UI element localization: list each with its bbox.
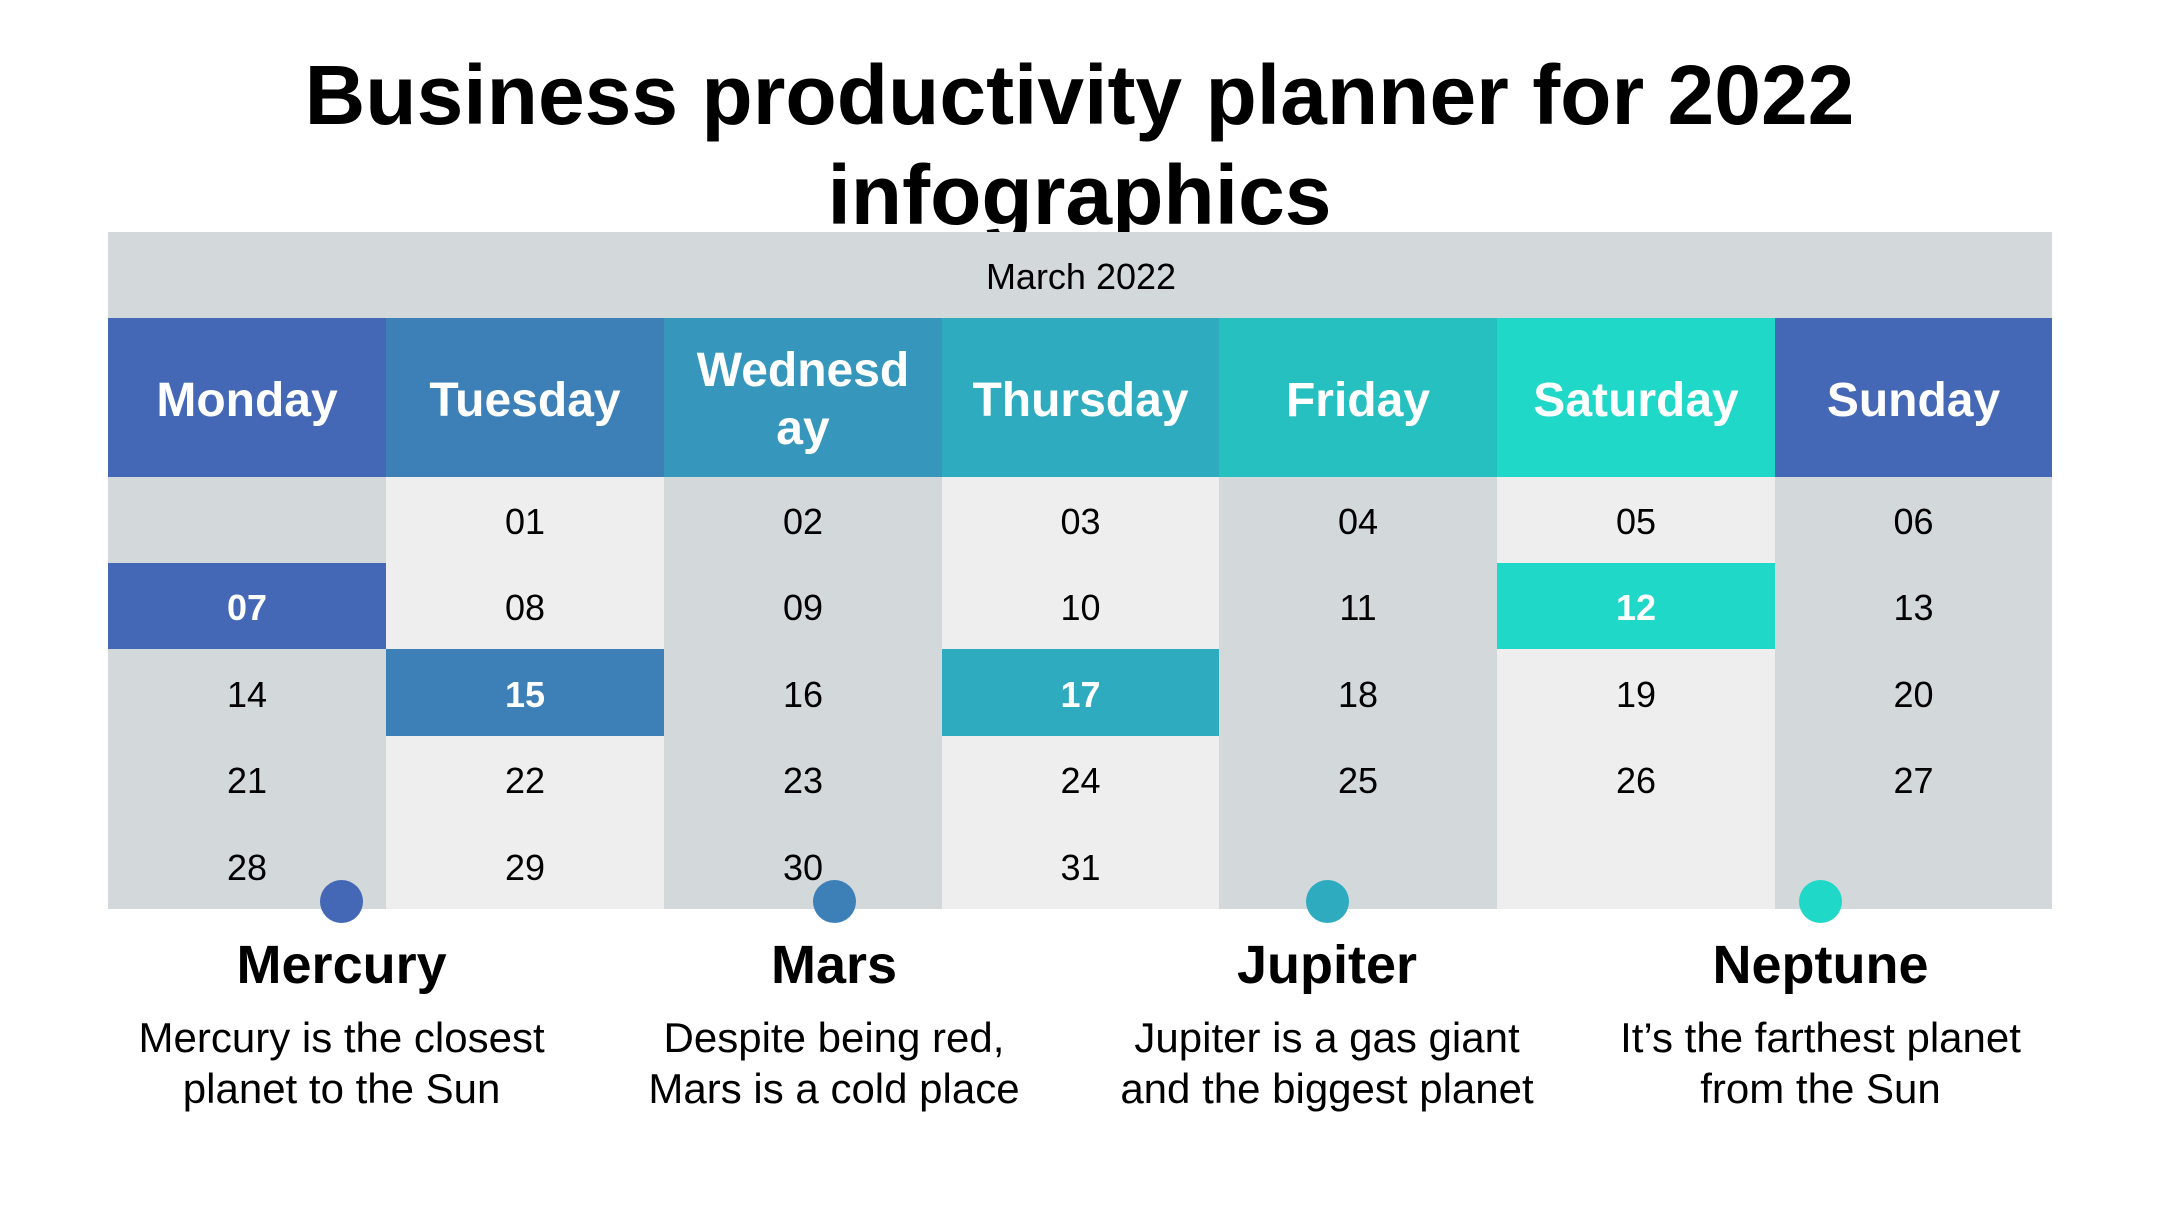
- highlighted date: 07: 07: [227, 587, 267, 628]
- marker dot: Neptune: [1798, 880, 1842, 923]
- column: Tuesday: 08: [505, 587, 545, 628]
- month heading: March 2022: [108, 232, 2052, 318]
- day header: Monday: [108, 318, 386, 477]
- highlighted date: 15: 15: [505, 674, 545, 715]
- day header: Wednesday: ay: [776, 402, 830, 454]
- text block: Jupiter: [1120, 935, 1534, 1112]
- description: Neptune: It’s the farthest planet: [1620, 1014, 2021, 1061]
- column: Tuesday: 01: [505, 501, 545, 542]
- description: Mars: Despite being red,: [664, 1014, 1004, 1061]
- marker dot: Mercury: [320, 880, 363, 923]
- column: Saturday: 05: [1616, 501, 1656, 542]
- column: Tuesday: 22: [505, 760, 545, 801]
- highlighted date: 15: [386, 649, 664, 736]
- column: Monday: 14: [227, 674, 267, 715]
- day header: Saturday: [1497, 318, 1775, 477]
- column: Saturday: 26: [1616, 760, 1656, 801]
- highlighted date: 12: 12: [1616, 587, 1656, 628]
- day header: Sunday: [1775, 318, 2052, 477]
- day header: Thursday: [942, 318, 1219, 477]
- title: [305, 48, 1854, 242]
- highlighted date: 17: [942, 649, 1219, 736]
- column: Thursday: 03: [1060, 501, 1101, 542]
- column: Sunday: 13: [1893, 587, 1934, 628]
- column: Wednesday: 09: [783, 587, 823, 628]
- column: Friday: 04: [1338, 501, 1378, 542]
- marker dot: Jupiter: [1306, 880, 1348, 923]
- column: Tuesday: 29: [505, 847, 545, 888]
- column: Tuesday: [386, 318, 664, 909]
- column: Sunday: 20: [1893, 674, 1934, 715]
- column: Thursday: 10: [1060, 587, 1101, 628]
- description: Mercury: Mercury is the closest: [139, 1014, 545, 1061]
- heading: Mars: Mars: [771, 935, 897, 995]
- day header: Tuesday: [386, 318, 664, 477]
- description: Jupiter: [1120, 1014, 1534, 1112]
- day header: Friday: Friday: [1286, 374, 1430, 427]
- text block: Neptune: [1620, 935, 2021, 1112]
- day header: Tuesday: Tuesday: [429, 374, 621, 427]
- day header: Monday: Monday: [156, 374, 338, 427]
- column: Friday: 18: [1338, 674, 1378, 715]
- title: Business productivity planner for 2022: [305, 48, 1854, 142]
- column: Sunday: 06: [1893, 501, 1934, 542]
- highlighted date: 07: [108, 563, 386, 649]
- column: Wednesday: 30: [783, 847, 823, 888]
- description: Mercury: planet to the Sun: [183, 1065, 500, 1112]
- column: Monday: 21: [227, 760, 267, 801]
- heading: Neptune: Neptune: [1712, 935, 1928, 995]
- column: Friday: [1219, 318, 1497, 909]
- day header: Wednesday: [664, 318, 942, 477]
- highlighted date: 12: [1497, 563, 1775, 649]
- text block: Mars: [648, 935, 1020, 1112]
- month heading: March 2022: March 2022: [986, 256, 1176, 297]
- marker dot: Mars: [812, 880, 856, 923]
- column: Thursday: [942, 318, 1219, 909]
- day header: Saturday: Saturday: [1533, 374, 1739, 427]
- heading: Mercury: Mercury: [237, 935, 447, 995]
- description: Mercury: [139, 1014, 545, 1112]
- column: Wednesday: 23: [783, 760, 823, 801]
- day header: Wednesday: Wednesd: [697, 344, 909, 397]
- day header: Friday: [1219, 318, 1497, 477]
- description: Jupiter: Jupiter is a gas giant: [1134, 1014, 1520, 1061]
- calendar table: [108, 232, 2052, 909]
- column: Monday: 28: [227, 847, 267, 888]
- column: Saturday: [1497, 318, 1775, 909]
- column: Wednesday: 02: [783, 501, 823, 542]
- column: Wednesday: [664, 318, 942, 909]
- day header: Thursday: Thursday: [972, 374, 1189, 427]
- column: Sunday: [1775, 318, 2052, 909]
- description: Mars: Mars is a cold place: [648, 1065, 1020, 1112]
- column: Friday: 11: [1339, 587, 1377, 628]
- column: Sunday: 27: [1893, 760, 1934, 801]
- description: Mars: [648, 1014, 1020, 1112]
- column: Friday: 25: [1338, 760, 1378, 801]
- text block: Mercury: [139, 935, 545, 1112]
- description: Neptune: [1620, 1014, 2021, 1112]
- description: Jupiter: and the biggest planet: [1120, 1065, 1534, 1112]
- title: infographics: [827, 148, 1332, 242]
- heading: Jupiter: Jupiter: [1237, 935, 1417, 995]
- column: Thursday: 31: [1060, 847, 1101, 888]
- highlighted date: 17: 17: [1060, 674, 1101, 715]
- column: Wednesday: 16: [783, 674, 823, 715]
- column: Saturday: 19: [1616, 674, 1656, 715]
- column: Thursday: 24: [1060, 760, 1101, 801]
- day header: Sunday: Sunday: [1827, 374, 2000, 427]
- column: Monday: [108, 318, 386, 909]
- description: Neptune: from the Sun: [1700, 1065, 1941, 1112]
